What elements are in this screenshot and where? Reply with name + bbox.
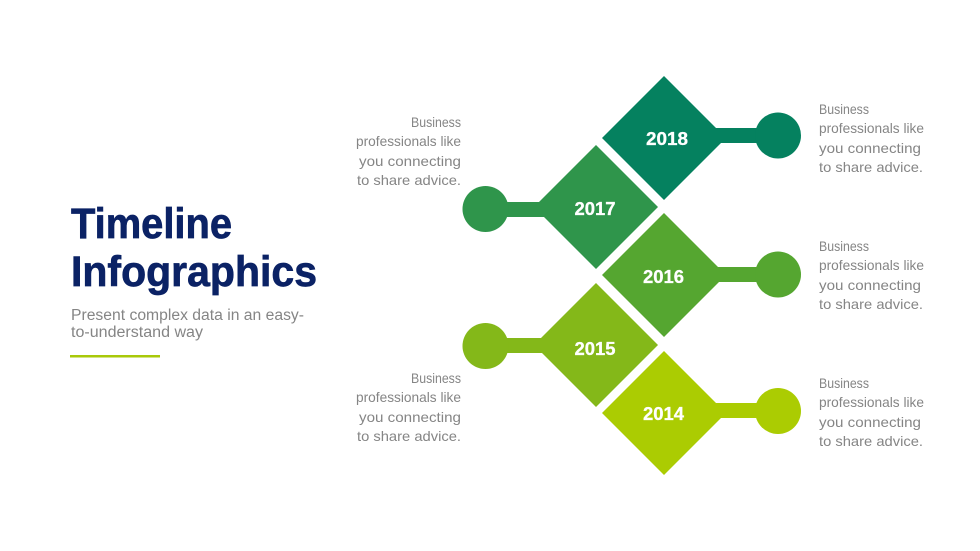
subtitle: to-understand way xyxy=(71,324,203,341)
text block: 2017: professionals like xyxy=(356,133,461,149)
milestone: 2014: 2014 xyxy=(643,404,684,424)
text block: 2014: professionals like xyxy=(819,394,924,410)
text block: 2018: Business xyxy=(819,101,869,117)
text block: 2016: Business xyxy=(819,238,869,254)
text block: 2018: you connecting xyxy=(819,140,921,156)
subtitle: Present complex data in an easy- xyxy=(71,307,304,324)
milestone: 2015 xyxy=(462,283,658,407)
text block: 2018: to share advice. xyxy=(819,159,923,175)
title xyxy=(71,200,317,296)
milestone: 2018 xyxy=(602,76,801,200)
text block: 2016: you connecting xyxy=(819,277,921,293)
text block: 2015: Business xyxy=(411,370,461,386)
milestone: 2015: 2015 xyxy=(574,339,616,359)
milestone: 2017: 2017 xyxy=(574,199,616,219)
milestone: 2014 xyxy=(602,351,801,475)
milestone: 2017 xyxy=(462,145,658,269)
text block: 2018 xyxy=(819,101,924,175)
text block: 2018: professionals like xyxy=(819,120,924,136)
milestone: 2016: 2016 xyxy=(643,267,684,287)
text block: 2015 xyxy=(356,370,461,444)
text block: 2017: Business xyxy=(411,114,461,130)
subtitle xyxy=(71,307,304,341)
text block: 2014: to share advice. xyxy=(819,433,923,449)
title: Infographics xyxy=(71,248,317,296)
text block: 2016: professionals like xyxy=(819,257,924,273)
title: Timeline xyxy=(71,200,232,248)
accent line xyxy=(70,355,160,358)
text block: 2014 xyxy=(819,375,924,449)
text block: 2015: to share advice. xyxy=(357,428,461,444)
text block: 2017: to share advice. xyxy=(357,172,461,188)
text block: 2016 xyxy=(819,238,924,312)
text block: 2016: to share advice. xyxy=(819,296,923,312)
milestone: 2016 xyxy=(602,213,801,337)
text block: 2015: you connecting xyxy=(359,409,461,425)
text block: 2017 xyxy=(356,114,461,188)
text block: 2014: you connecting xyxy=(819,414,921,430)
milestone: 2018: 2018 xyxy=(646,129,688,149)
text block: 2014: Business xyxy=(819,375,869,391)
text block: 2015: professionals like xyxy=(356,389,461,405)
text block: 2017: you connecting xyxy=(359,153,461,169)
